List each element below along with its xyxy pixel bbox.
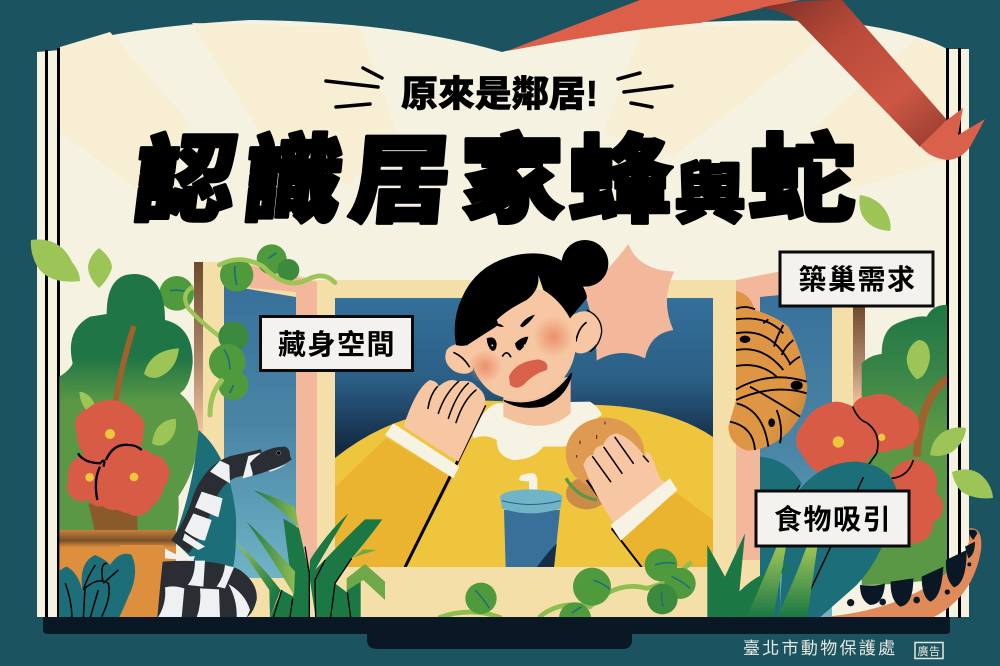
hair xyxy=(455,253,587,346)
footer organisation name: 臺北市動物保護處 xyxy=(743,639,897,658)
bush right xyxy=(862,305,948,585)
sleeve right xyxy=(612,493,713,567)
panel: right window shutter xyxy=(736,271,865,617)
panel: center window frame xyxy=(319,280,736,617)
title: 蛇 xyxy=(748,127,856,235)
hair bun xyxy=(562,240,608,287)
ear left xyxy=(445,344,473,374)
pot xyxy=(88,503,137,532)
left plants clipped xyxy=(53,274,236,618)
bee nest xyxy=(728,291,807,451)
leaves right xyxy=(930,427,993,498)
title: 蜂 xyxy=(568,128,673,235)
title xyxy=(128,127,856,235)
snake lower coil xyxy=(157,561,257,617)
sweater xyxy=(335,400,713,567)
shelf xyxy=(59,530,176,618)
teal leaf behind snake xyxy=(173,430,236,567)
title: 居 xyxy=(345,127,455,234)
label: 食物吸引 xyxy=(756,491,909,546)
snake neck and head xyxy=(180,460,263,547)
label: 食物吸引: 食物吸引 xyxy=(774,504,892,535)
eyes and brows xyxy=(494,315,535,327)
burger xyxy=(566,477,607,509)
vine: bottom xyxy=(440,549,696,634)
neck xyxy=(503,377,571,426)
face xyxy=(467,288,576,400)
snake tail right xyxy=(819,528,981,617)
flowers right xyxy=(796,394,943,543)
teal plant xyxy=(53,554,135,618)
vine: left top xyxy=(159,244,335,415)
mouth xyxy=(509,359,547,388)
left arm line xyxy=(405,405,485,567)
bush left xyxy=(53,274,236,618)
panel: left window shutter xyxy=(194,262,335,617)
label: 築巢需求 xyxy=(780,252,933,306)
teal leaves xyxy=(760,456,802,490)
cuff right xyxy=(611,478,677,541)
flowers left xyxy=(67,400,169,516)
left hand xyxy=(403,380,485,462)
ear right xyxy=(568,311,601,353)
choker xyxy=(504,373,572,407)
label: 藏身空間 xyxy=(260,316,412,370)
ad badge xyxy=(915,642,943,658)
subtitle: 原來是鄰居! xyxy=(401,73,598,114)
icon: pink burst xyxy=(583,244,674,361)
sleeve left xyxy=(335,438,453,567)
girl xyxy=(335,240,713,567)
title: 與 xyxy=(675,158,745,232)
leaves floating xyxy=(31,195,891,288)
title: 識 xyxy=(238,128,348,235)
snake xyxy=(157,447,292,617)
plant: green blades left xyxy=(236,490,385,617)
right plants clipped xyxy=(707,305,948,617)
right hand xyxy=(583,433,677,525)
label: 藏身空間: 藏身空間 xyxy=(278,329,396,360)
burst lines right of subtitle xyxy=(618,73,672,107)
collar xyxy=(472,402,602,460)
right arm line xyxy=(587,480,642,567)
label: 築巢需求: 築巢需求 xyxy=(798,264,917,295)
ribbon xyxy=(507,0,985,160)
title: 家 xyxy=(460,128,565,235)
book base xyxy=(43,617,950,649)
title: 認 xyxy=(128,128,242,234)
beige sill xyxy=(335,567,713,617)
cuff left xyxy=(385,423,459,478)
ad badge: 廣告 xyxy=(918,644,940,658)
burst lines left of subtitle xyxy=(326,68,382,107)
cup xyxy=(504,510,560,567)
plant spikes xyxy=(707,533,791,617)
